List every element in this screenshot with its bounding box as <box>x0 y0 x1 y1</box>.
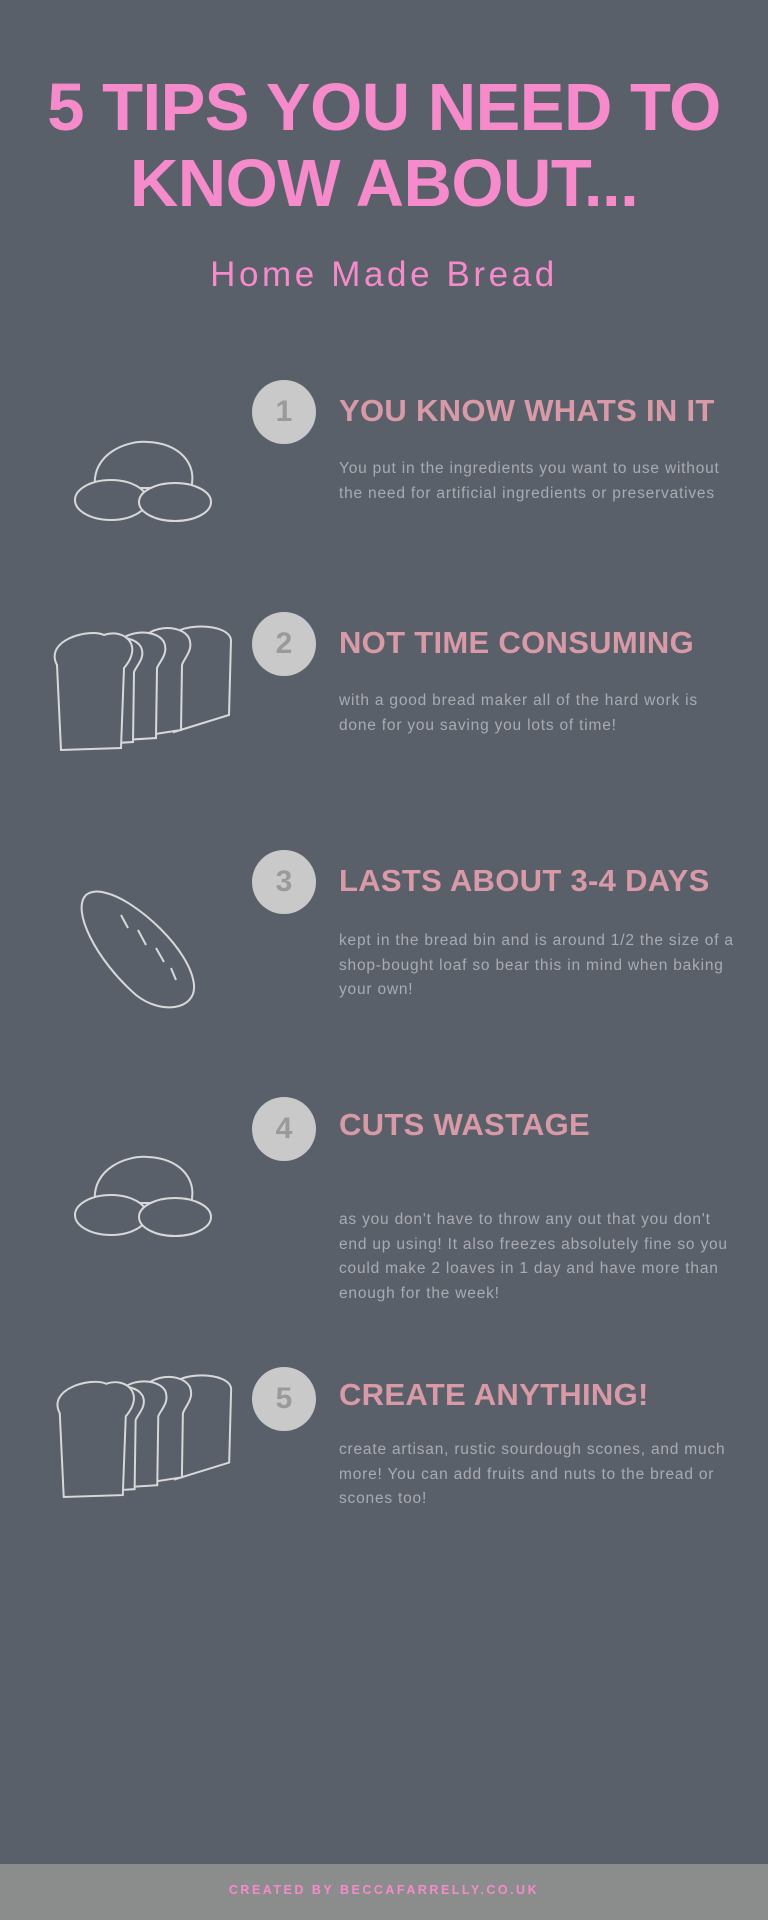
number circle 1 <box>252 380 316 444</box>
number circle 1: 1 <box>276 395 292 428</box>
body 5: scones too! <box>339 1490 427 1507</box>
body 2: done for you saving you lots of time! <box>339 716 617 734</box>
heading 1: YOU KNOW WHATS IN IT <box>339 393 715 428</box>
body 1: the need for artificial ingredients or preservatives <box>339 484 715 502</box>
title: 5 TIPS YOU NEED TO <box>47 70 721 145</box>
number circle 2 <box>252 612 316 676</box>
number circle 5 <box>252 1367 316 1431</box>
title: KNOW ABOUT... <box>130 146 638 221</box>
heading 5: CREATE ANYTHING! <box>339 1377 649 1412</box>
icon: buns <box>74 440 212 522</box>
heading 4: CUTS WASTAGE <box>339 1107 590 1142</box>
body 4: could make 2 loaves in 1 day and have more than <box>339 1260 719 1277</box>
body 5: more! You can add fruits and nuts to the bread or <box>339 1466 714 1482</box>
footer: CREATED BY BECCAFARRELLY.CO.UK <box>229 1883 539 1897</box>
tip 4 <box>74 1097 728 1302</box>
tip 2 <box>54 612 698 751</box>
body 5 <box>339 1441 725 1507</box>
body 4 <box>339 1211 728 1302</box>
heading 2: NOT TIME CONSUMING <box>339 625 694 660</box>
body 3: kept in the bread bin and is around 1/2 the size of a <box>339 932 734 949</box>
title <box>47 70 721 221</box>
icon: toast slices <box>56 1374 232 1498</box>
number circle 5: 5 <box>276 1382 292 1415</box>
heading 3: LASTS ABOUT 3-4 DAYS <box>339 863 710 898</box>
body 4: end up using! It also freezes absolutely fine so you <box>339 1236 728 1252</box>
body 2: with a good bread maker all of the hard work is <box>339 692 698 709</box>
number circle 4 <box>252 1097 316 1161</box>
body 3 <box>339 932 734 998</box>
icon: buns <box>74 1156 212 1237</box>
body 1: You put in the ingredients you want to use without <box>339 460 720 477</box>
icon: toast slices <box>54 626 232 751</box>
icon: baguette <box>80 890 196 1008</box>
tip 3 <box>80 850 734 1008</box>
body 4: as you don't have to throw any out that you don't <box>339 1211 711 1228</box>
footer <box>0 1864 768 1920</box>
body 2 <box>339 692 698 734</box>
subtitle: Home Made Bread <box>210 255 558 294</box>
tip 5 <box>56 1367 725 1507</box>
body 4: enough for the week! <box>339 1284 500 1302</box>
body 1 <box>339 460 720 502</box>
number circle 2: 2 <box>276 627 292 660</box>
body 3: your own! <box>339 981 413 998</box>
tip 1 <box>74 380 720 522</box>
body 3: shop-bought loaf so bear this in mind when baking <box>339 956 724 974</box>
number circle 4: 4 <box>276 1112 292 1145</box>
number circle 3: 3 <box>276 865 292 898</box>
body 5: create artisan, rustic sourdough scones, and much <box>339 1441 725 1458</box>
number circle 3 <box>252 850 316 914</box>
